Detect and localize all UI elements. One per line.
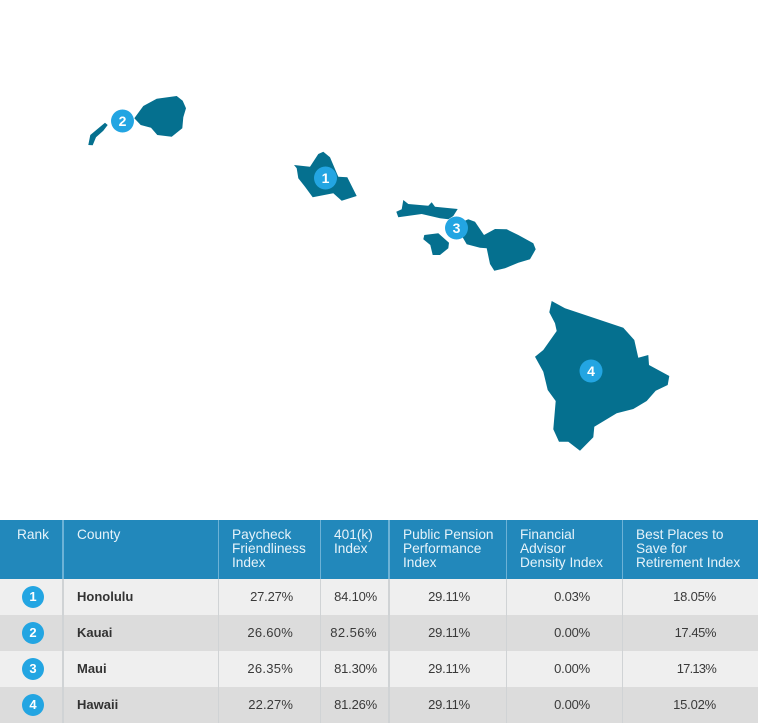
table row: Maui — [0, 651, 758, 687]
table row: Honolulu: 1 — [29, 589, 37, 604]
table row: Kauai — [0, 615, 758, 651]
column heading: 401(k) — [334, 527, 373, 556]
table row: Maui: 17.13% — [677, 661, 716, 676]
table row: Maui: 3 — [29, 661, 37, 676]
table row: Hawaii: 0.00% — [554, 697, 590, 712]
marker 1: Honolulu — [314, 166, 337, 190]
column heading: financial advisor — [520, 527, 603, 570]
table row: Hawaii: 15.02% — [673, 697, 716, 712]
table row: Maui: 26.35% — [247, 661, 293, 676]
column heading: paycheck friendliness: Friendliness — [232, 541, 306, 556]
table row: Honolulu: Honolulu — [77, 589, 133, 604]
column heading: public pension: Public Pension — [403, 527, 494, 542]
column heading: public pension: Performance — [403, 541, 481, 556]
table row: Kauai: 0.00% — [554, 625, 590, 640]
table row: Honolulu: 29.11% — [428, 589, 470, 604]
table row: Hawaii: 29.11% — [428, 697, 470, 712]
column heading: 401(k): Index — [334, 541, 367, 556]
column heading: county: County — [77, 527, 120, 542]
island: Hawaii — [535, 301, 669, 451]
table row: Maui: Maui — [77, 661, 107, 676]
table row: Honolulu: 18.05% — [673, 589, 716, 604]
column heading: financial advisor: Advisor — [520, 541, 566, 556]
column heading: paycheck friendliness: Paycheck — [232, 527, 291, 542]
column heading: paycheck friendliness — [232, 527, 306, 570]
column heading: 401(k): 401(k) — [334, 527, 373, 542]
island: Molokai — [396, 200, 458, 219]
marker 4: Hawaii — [580, 360, 602, 382]
column heading: best places: Retirement Index — [636, 555, 740, 570]
table row: Hawaii: 4 — [29, 697, 37, 712]
marker 3: Maui: 3 — [453, 220, 461, 236]
marker 4: Hawaii: 4 — [587, 363, 595, 379]
island: Kauai — [134, 96, 186, 137]
column heading: paycheck friendliness: Index — [232, 555, 265, 570]
marker 1: Honolulu: 1 — [322, 170, 330, 186]
ranking table — [0, 520, 758, 723]
table row: Hawaii — [0, 687, 758, 723]
table row: Kauai: Kauai — [77, 625, 112, 640]
column heading: best places: Save for — [636, 541, 687, 556]
island: Lanai — [423, 233, 449, 255]
table row: Honolulu — [0, 579, 758, 615]
marker 2: Kauai — [111, 110, 134, 132]
table row: Kauai: 82.56% — [330, 625, 377, 640]
table row: Honolulu: 27.27% — [250, 589, 293, 604]
island: Niihau — [88, 123, 108, 145]
table row: Hawaii: 81.26% — [334, 697, 377, 712]
column heading: financial advisor: Density Index — [520, 555, 603, 570]
table row: Maui: 81.30% — [334, 661, 377, 676]
island: Maui — [455, 219, 536, 271]
island: Oahu — [294, 152, 357, 201]
table row: Kauai: 29.11% — [428, 625, 470, 640]
table row: Kauai: 17.45% — [675, 625, 716, 640]
marker 3: Maui — [445, 216, 468, 240]
marker 2: Kauai: 2 — [119, 113, 127, 129]
table row: Kauai: 2 — [29, 625, 37, 640]
table row: Honolulu: 84.10% — [334, 589, 377, 604]
table row: Maui: 0.00% — [554, 661, 590, 676]
table header — [0, 520, 758, 579]
column heading: financial advisor: Financial — [520, 527, 575, 542]
column heading: best places: Best Places to — [636, 527, 724, 542]
table row: Maui: 29.11% — [428, 661, 470, 676]
table row: Hawaii: 22.27% — [248, 697, 293, 712]
table row: Honolulu: 0.03% — [554, 589, 590, 604]
table row: Hawaii: Hawaii — [77, 697, 118, 712]
map of Hawaii counties — [88, 96, 670, 451]
column heading: rank: Rank — [17, 527, 49, 542]
column heading: best places — [636, 527, 740, 570]
column heading: public pension — [403, 527, 494, 570]
table row: Kauai: 26.60% — [247, 625, 293, 640]
column heading: public pension: Index — [403, 555, 436, 570]
